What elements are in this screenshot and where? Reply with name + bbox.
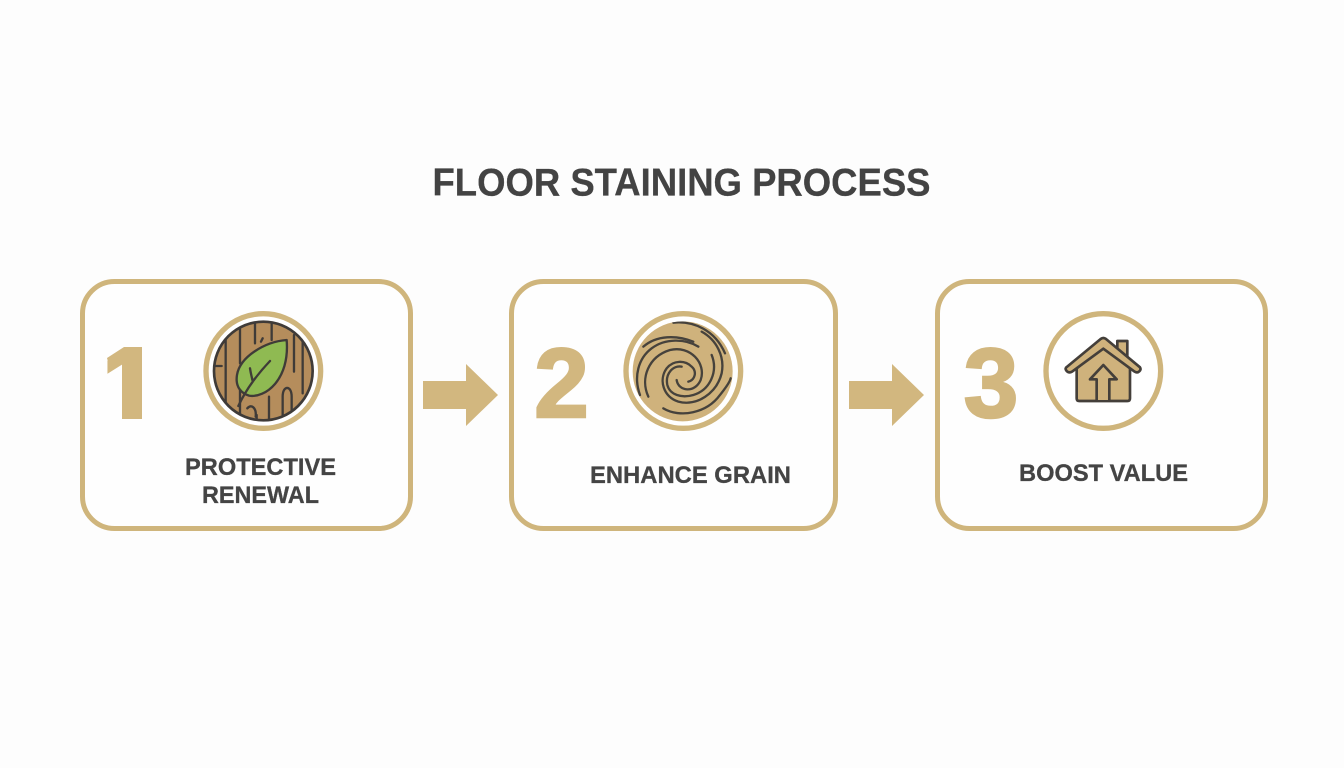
arrow: step 2 to step 3 [849,364,924,426]
step number 1: 1 [102,329,156,439]
step number 2: 2 [534,328,589,438]
step number 1 [107,347,142,419]
label: protective renewal: RENEWAL [202,482,319,509]
step number 3: 3 [964,328,1018,438]
panel: step 3 boost value [938,282,1266,528]
icon: wood grain swirl [626,314,741,428]
panel: step 2 enhance grain [512,282,836,528]
label: protective renewal [185,454,336,509]
icon: house with up arrow [1046,314,1161,428]
label: protective renewal: PROTECTIVE [185,454,336,481]
icon: leaf on wood [206,314,321,428]
label: boost value: BOOST VALUE [1019,460,1188,487]
label: enhance grain: ENHANCE GRAIN [590,462,791,489]
panel: step 1 protective renewal [82,282,410,528]
arrow: step 1 to step 2 [423,364,498,426]
title: FLOOR STAINING PROCESS [432,162,930,204]
